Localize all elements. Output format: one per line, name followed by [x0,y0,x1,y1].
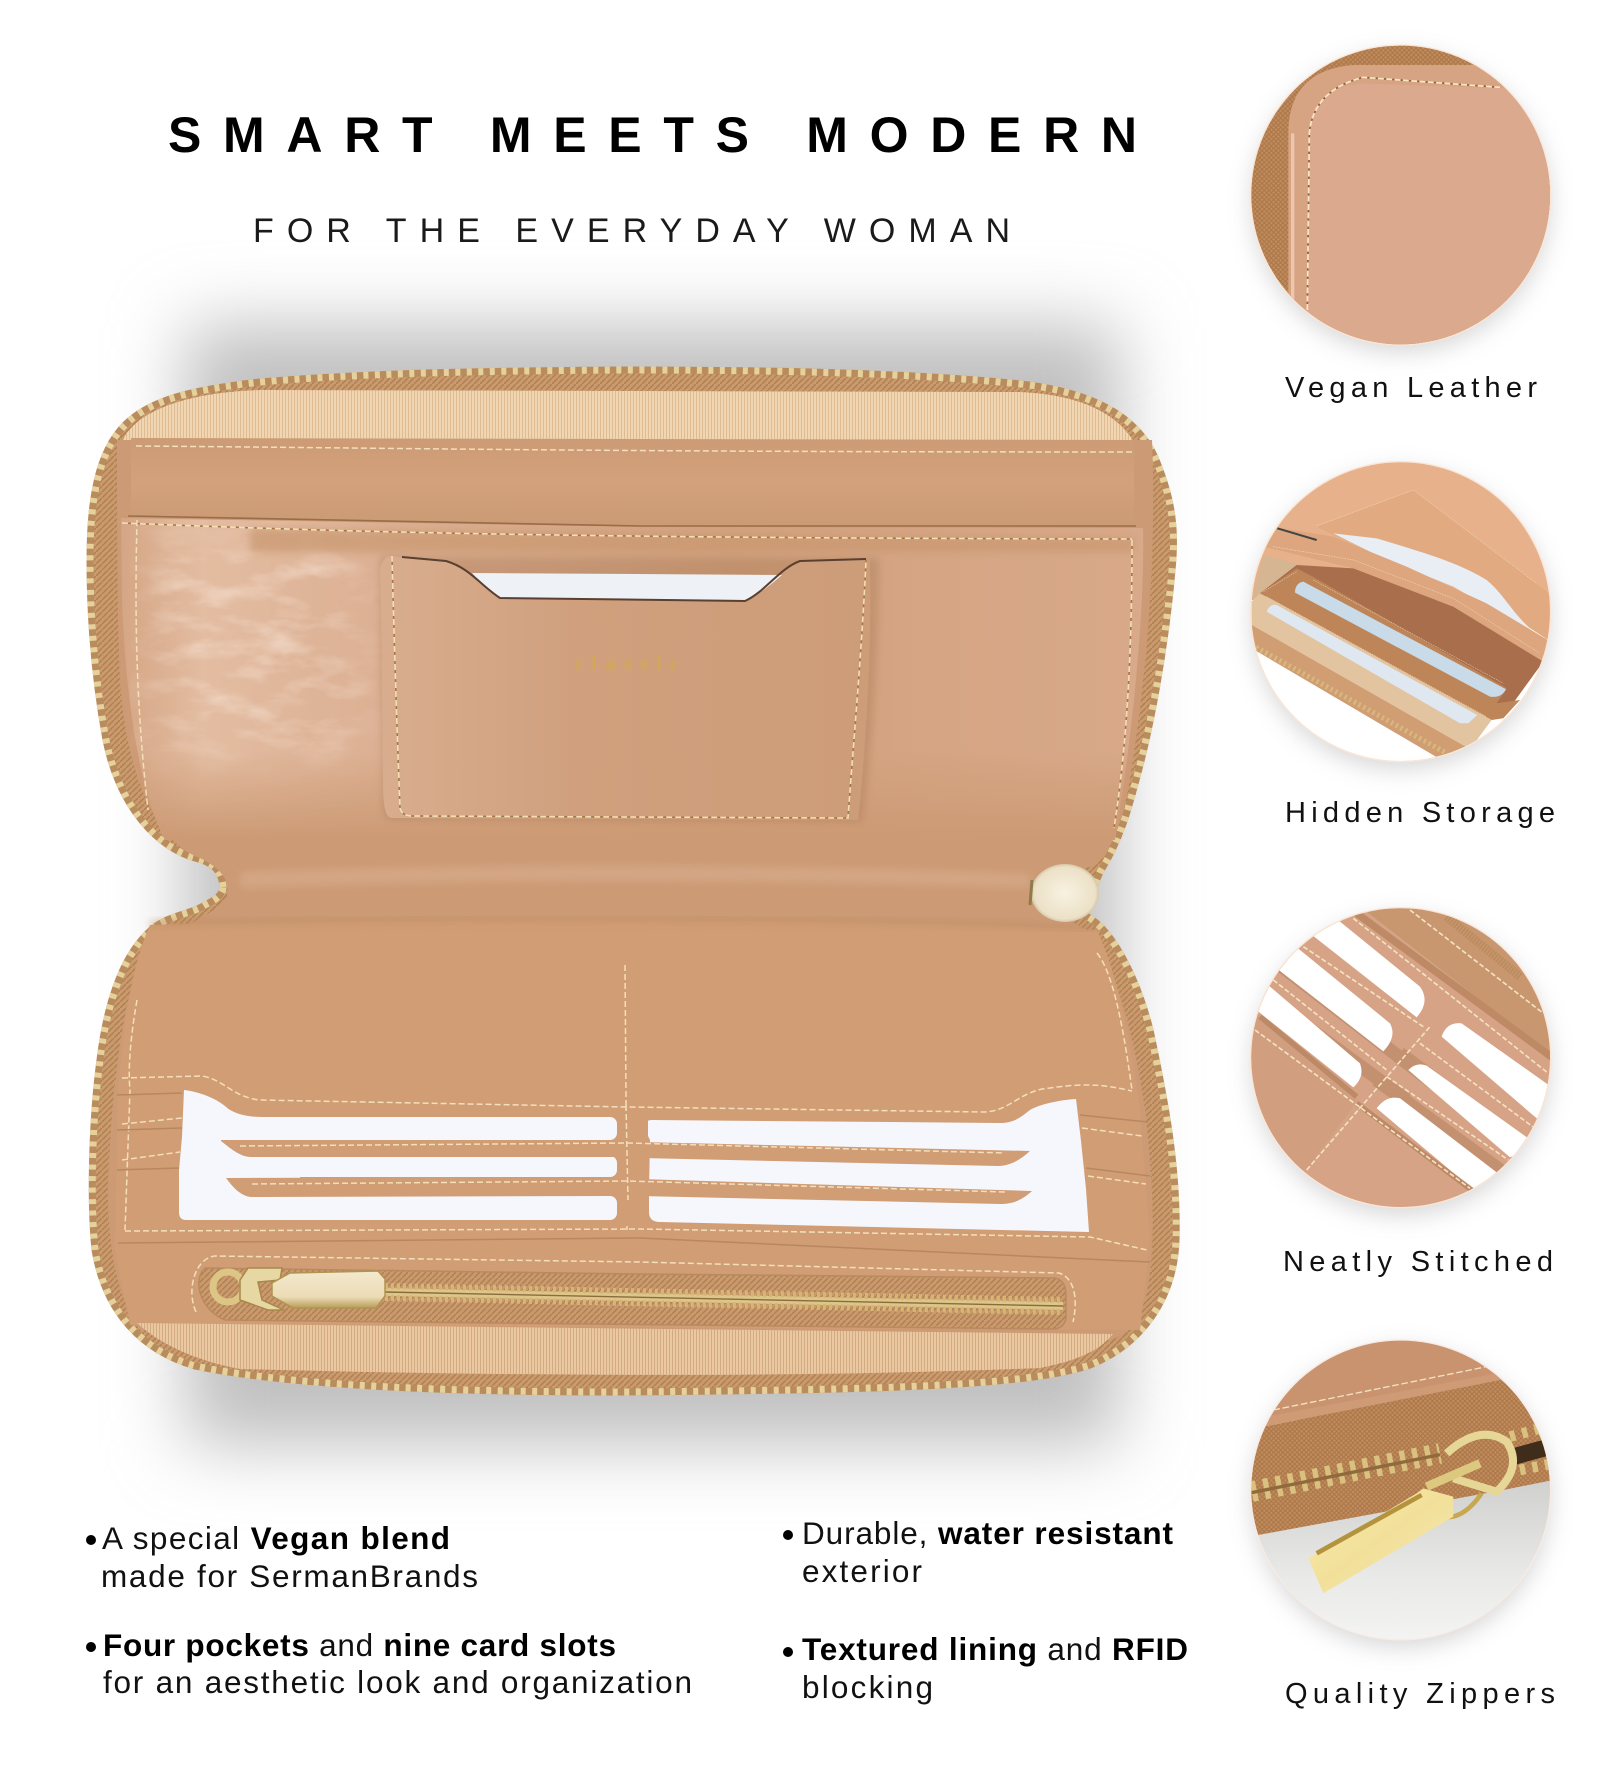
detail: neatly stitched [1250,907,1553,1278]
zip pull [213,1268,385,1310]
top pocket [128,438,1136,528]
detail: quality zippers [1250,1339,1555,1710]
circle image [1250,43,1557,353]
bullet: lining [783,1631,1188,1705]
label: Vegan Leather [1285,372,1537,404]
zipper surround [90,370,1176,1392]
card pocket [380,556,879,822]
pocket card slot [472,573,782,600]
card slot strips [221,1140,617,1157]
upper lining [120,390,1138,450]
label: Neatly Stitched [1283,1246,1553,1278]
left card stack [179,1090,617,1220]
upper panel [121,518,1143,840]
cards [179,1090,1089,1232]
stitched top edge of card slots [122,1076,1132,1112]
bullet: lining: blocking [802,1669,933,1705]
bullet: vegan blend: made for SermanBrands [101,1558,478,1594]
bullet: water resistant [783,1515,1174,1589]
label: Quality Zippers [1285,1678,1555,1710]
zipper pull [1308,1435,1513,1593]
white slots [1250,913,1553,1188]
title: SMART MEETS MODERN [168,107,1137,163]
bullet: water resistant: Durable, water resistant [802,1515,1174,1551]
embossed logo: classic [574,651,679,675]
circle image [1250,460,1553,767]
circle image [1250,907,1553,1210]
detail: hidden storage [1250,460,1555,829]
bullet: pockets: for an aesthetic look and organization [103,1664,692,1700]
subtitle: FOR THE EVERYDAY WOMAN [253,212,1010,250]
right card stack [644,1099,1089,1232]
leather base [108,440,1153,1340]
hinge highlight [240,865,1030,888]
bullets: right column [783,1515,1188,1705]
detail: vegan leather [1250,43,1557,404]
zip pocket [192,1256,1075,1329]
wallet drop shadow [185,325,1120,1445]
side seam lines [117,1093,1150,1262]
bullet: pockets [86,1627,692,1700]
wallet illustration [90,370,1176,1392]
lower panel [115,919,1150,1330]
snap button [1030,864,1099,922]
label: Hidden Storage [1285,797,1555,829]
bullets: left column [86,1520,692,1700]
lower lining [137,1323,1113,1375]
bullet: vegan blend [86,1520,478,1594]
bullet: pockets: Four pockets and nine card slots [103,1627,616,1663]
white card sliver [1333,533,1540,637]
bullet: lining: Textured lining and RFID [802,1631,1188,1667]
circle image [1250,1339,1553,1643]
bullet: water resistant: exterior [802,1553,922,1589]
bullet: vegan blend: A special Vegan blend [102,1520,450,1556]
